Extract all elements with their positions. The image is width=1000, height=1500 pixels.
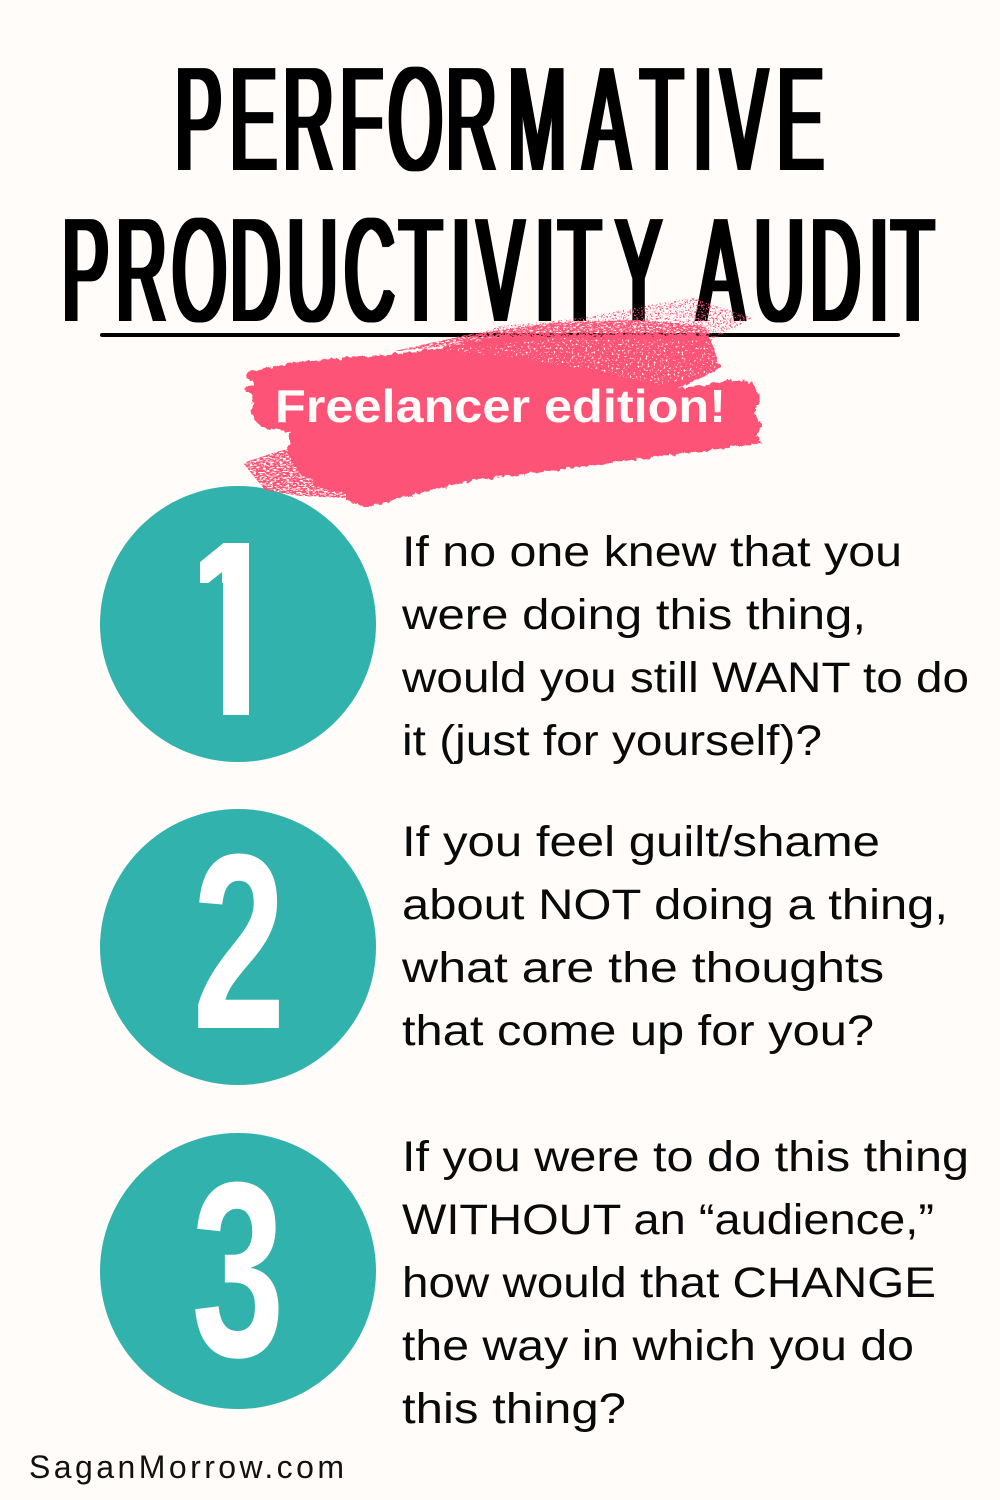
question 3 text: If you were to do this thing bbox=[402, 1133, 969, 1181]
number 3: 3 bbox=[191, 1130, 285, 1410]
question 2 text: what are the thoughts bbox=[401, 944, 884, 992]
number 2: 2 bbox=[192, 802, 286, 1082]
item 1 bbox=[200, 535, 967, 764]
question 3 text: the way in which you do bbox=[402, 1322, 914, 1370]
subtitle: Freelancer edition! bbox=[275, 380, 726, 432]
question 3 text: how would that CHANGE bbox=[402, 1259, 936, 1307]
question 3 text: this thing? bbox=[402, 1385, 626, 1433]
question 1 text: it (just for yourself)? bbox=[402, 717, 822, 765]
circle 2 bbox=[100, 809, 376, 1085]
brush dry-texture top right bbox=[450, 298, 753, 345]
question 1 text: would you still WANT to do bbox=[401, 654, 969, 702]
question 2 text: about NOT doing a thing, bbox=[402, 881, 948, 929]
question 1 text: If no one knew that you bbox=[402, 528, 902, 576]
circle 1 bbox=[100, 486, 376, 762]
question 2 text: If you feel guilt/shame bbox=[402, 818, 880, 866]
question 2 text: that come up for you? bbox=[402, 1007, 874, 1055]
brush banner with subtitle bbox=[243, 298, 763, 508]
circle 3 bbox=[100, 1133, 376, 1409]
brush dry-texture top edge bbox=[390, 320, 710, 352]
question 3 text: WITHOUT an “audience,” bbox=[402, 1196, 934, 1244]
brush stroke solid bbox=[245, 335, 763, 508]
question 3 text bbox=[402, 1133, 969, 1433]
item 2 bbox=[100, 802, 948, 1085]
item 3 bbox=[100, 1130, 969, 1433]
number 1: 1 bbox=[175, 489, 287, 768]
question 1 text: were doing this thing, bbox=[401, 591, 866, 639]
question 1 text bbox=[401, 528, 969, 765]
title underline bbox=[100, 333, 900, 337]
title line 2: PRODUCTIVITY AUDIT bbox=[62, 187, 934, 353]
question 2 text bbox=[401, 818, 948, 1055]
title line 1: PERFORMATIVE bbox=[175, 36, 824, 202]
title bbox=[62, 36, 934, 353]
brush dry-texture bottom left bbox=[243, 448, 346, 498]
footer website: SaganMorrow.com bbox=[29, 1449, 344, 1485]
brush worn highlights bbox=[440, 338, 720, 385]
